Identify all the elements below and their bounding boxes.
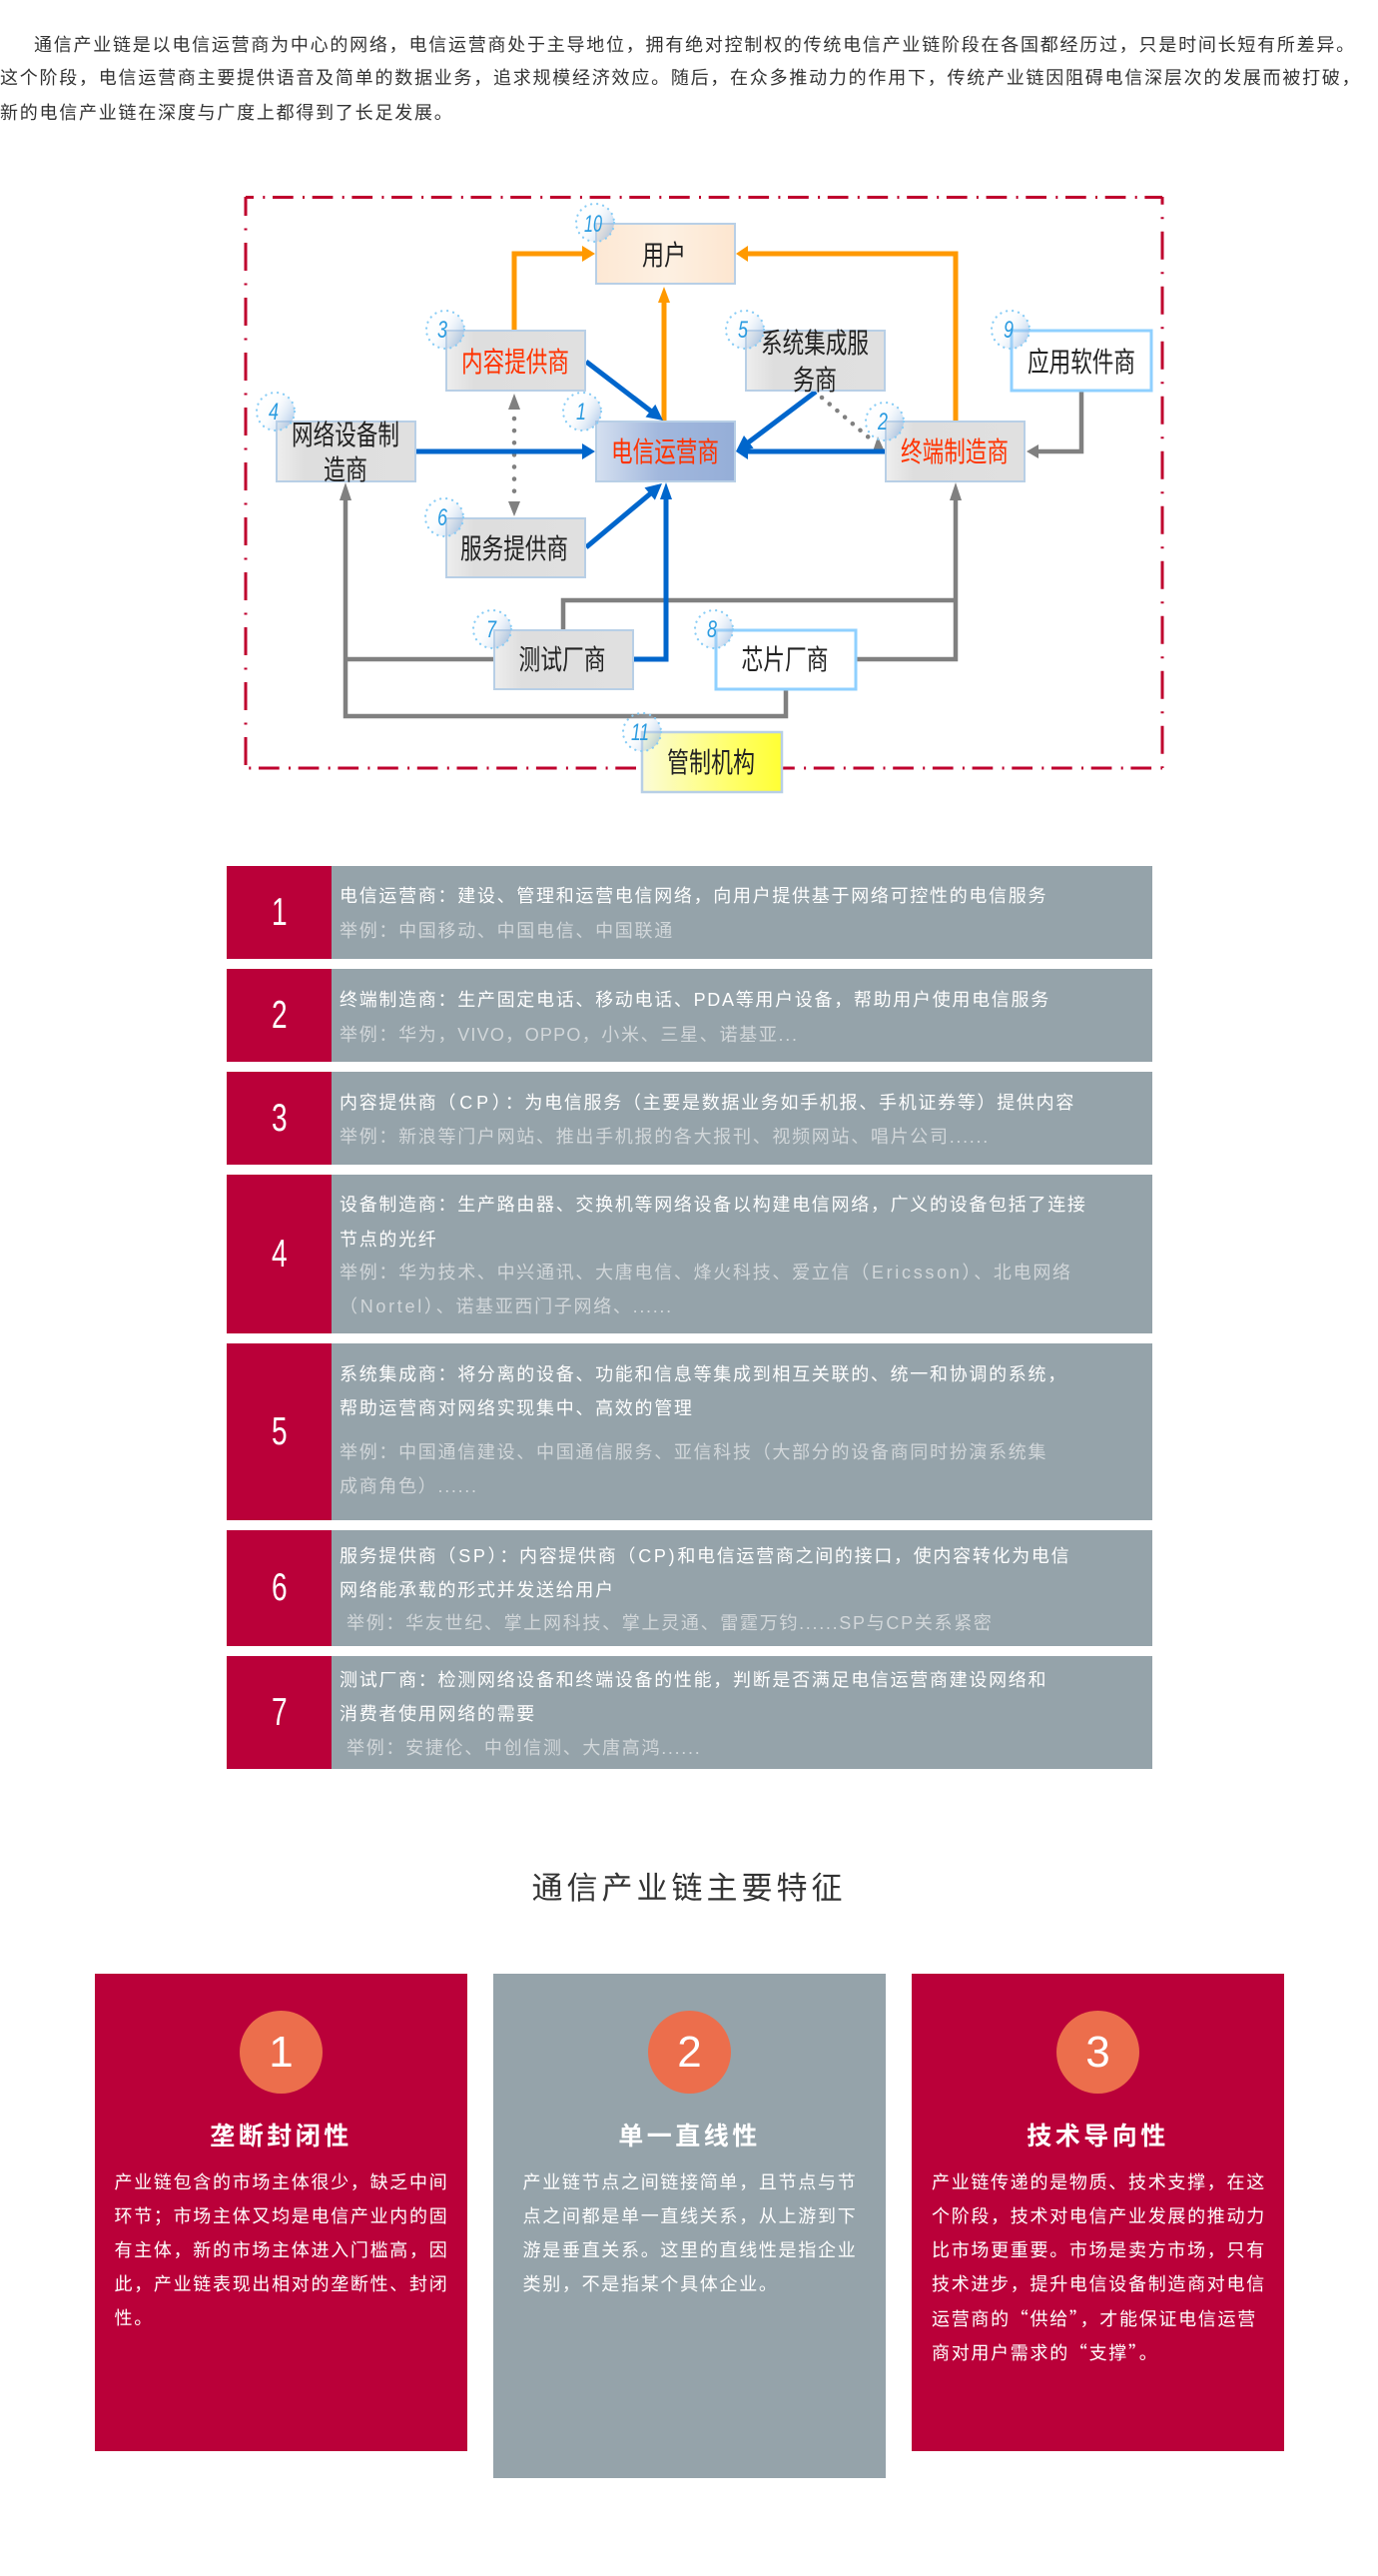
list row 5: 举例：中国通信建设、中国通信服务、亚信科技（大部分的设备商同时扮演系统集: [340, 1442, 1047, 1462]
arrows: dotted grey: [508, 394, 885, 516]
card 1 body: [114, 2172, 448, 2328]
numbered dotted badges: 9: [1004, 317, 1014, 344]
list row 3: 举例：新浪等门户网站、推出手机报的各大报刊、视频网站、唱片公司......: [340, 1127, 990, 1147]
box: 内容提供商: [446, 331, 585, 391]
card 1 heading: 垄断封闭性: [210, 2123, 352, 2150]
numbered dotted badges: 10: [584, 211, 602, 238]
arrows: orange to user: [514, 246, 956, 421]
list row 2: 2: [272, 993, 287, 1037]
box: 终端制造商: [886, 422, 1025, 481]
box: 用户: [596, 224, 735, 284]
box: 测试厂商: [494, 630, 633, 689]
list row 6: 网络能承载的形式并发送给用户: [340, 1580, 615, 1600]
numbered dotted badges: 6: [437, 504, 447, 531]
box: 终端制造商: 终端制造商: [901, 436, 1009, 467]
list row 1: 举例：中国移动、中国电信、中国联通: [340, 921, 674, 941]
numbered dotted badges: 7: [486, 616, 497, 643]
list row 1: 电信运营商：建设、管理和运营电信网络，向用户提供基于网络可控性的电信服务: [340, 885, 1047, 905]
box: 管制机构: 管制机构: [667, 747, 755, 778]
list row 7: 举例：安捷伦、中创信测、大唐高鸿......: [346, 1738, 701, 1758]
numbered dotted badges: 3: [437, 317, 447, 344]
list row 7: [227, 1656, 1152, 1769]
card 2 heading: 单一直线性: [618, 2123, 761, 2150]
list row 3: 3: [272, 1097, 287, 1139]
card 3 body: [932, 2172, 1266, 2365]
numbered dotted badges: 11: [631, 719, 649, 746]
arrows: grey connections: [340, 392, 1081, 716]
list row 7: 测试厂商：检测网络设备和终端设备的性能，判断是否满足电信运营商建设网络和: [340, 1670, 1047, 1690]
box: 系统集成服务商: [746, 328, 885, 396]
list row 7: 7: [272, 1690, 287, 1734]
card 3 number badge: [1056, 2011, 1139, 2094]
numbered dotted badges: 4: [269, 399, 279, 426]
card 1 body: 此，产业链表现出相对的垄断性、封闭: [114, 2274, 448, 2294]
card 1 body: 性。: [114, 2308, 154, 2328]
list row 6: 6: [272, 1566, 287, 1609]
card 1: [95, 1974, 467, 2451]
list row 5: 成商角色）......: [340, 1476, 478, 1496]
dash-dot frame: [246, 197, 1162, 768]
card 2 number badge: [648, 2011, 731, 2094]
list row 2: 举例：华为，VIVO，OPPO，小米、三星、诺基亚...: [340, 1025, 799, 1045]
list row 6: 服务提供商（SP）：内容提供商（CP)和电信运营商之间的接口，使内容转化为电信: [340, 1546, 1070, 1566]
list row 4: 设备制造商：生产路由器、交换机等网络设备以构建电信网络，广义的设备包括了连接: [340, 1195, 1087, 1215]
section heading: 通信产业链主要特征: [531, 1871, 847, 1906]
list row 1: 1: [272, 891, 287, 933]
list row 4: [227, 1175, 1152, 1333]
box: 应用软件商: 应用软件商: [1028, 347, 1135, 378]
card 3 number badge: 3: [1085, 2028, 1110, 2077]
box: 服务提供商: 服务提供商: [460, 533, 568, 564]
list row 6: [227, 1530, 1152, 1646]
industry chain diagram: [244, 196, 1164, 793]
card 3 heading: 技术导向性: [1027, 2123, 1169, 2150]
box: 电信运营商: [596, 422, 735, 481]
box: 系统集成服务商: 务商: [793, 365, 837, 396]
intro paragraph: 通信产业链是以电信运营商为中心的网络，电信运营商处于主导地位，拥有绝对控制权的传统电信产业链阶段在各国都经历过，只是时间长短有所差异。: [34, 35, 1356, 55]
list row 7: 消费者使用网络的需要: [340, 1704, 536, 1724]
card 2 body: 游是垂直关系。这里的直线性是指企业: [523, 2240, 857, 2260]
box: 电信运营商: 电信运营商: [611, 436, 719, 467]
list row 4: （Nortel）、诺基亚西门子网络、......: [340, 1296, 673, 1316]
card 3 body: 技术进步，提升电信设备制造商对电信: [932, 2274, 1266, 2294]
numbered dotted badges: 1: [576, 399, 586, 426]
intro paragraph: [0, 35, 1361, 123]
card 2 body: [523, 2172, 857, 2294]
list row 5: 5: [272, 1410, 287, 1452]
box: 芯片厂商: [716, 630, 856, 689]
box: 测试厂商: 测试厂商: [519, 644, 605, 675]
list row 4: 4: [272, 1233, 287, 1275]
numbered dotted badges: 2: [877, 409, 888, 435]
numbered dotted badges: [257, 204, 1030, 751]
card 1 body: 产业链包含的市场主体很少，缺乏中间: [114, 2172, 448, 2192]
box: 系统集成服务商: 系统集成服: [761, 328, 869, 359]
box: 网络设备制造商: [277, 420, 415, 485]
card 2 body: 类别，不是指某个具体企业。: [523, 2274, 779, 2294]
arrows: blue to operator: [415, 362, 885, 659]
list row 3: 内容提供商（CP）：为电信服务（主要是数据业务如手机报、手机证券等）提供内容: [340, 1093, 1075, 1113]
box: 网络设备制造商: 网络设备制: [292, 420, 399, 450]
intro paragraph: 新的电信产业链在深度与广度上都得到了长足发展。: [0, 103, 453, 123]
card 3 body: 产业链传递的是物质、技术支撑，在这: [932, 2172, 1266, 2192]
card 3 body: 商对用户需求的“支撑”。: [932, 2339, 1158, 2365]
list row 3: [227, 1072, 1152, 1165]
box: 用户: 用户: [642, 240, 686, 271]
list row 4: 节点的光纤: [340, 1229, 437, 1249]
card 3 body: 比市场更重要。市场是卖方市场，只有: [932, 2240, 1266, 2260]
numbered dotted badges: 5: [738, 317, 748, 344]
card 2 body: 点之间都是单一直线关系，从上游到下: [523, 2206, 857, 2226]
card 1 number badge: [240, 2011, 323, 2094]
box: 服务提供商: [446, 518, 585, 577]
card 1 body: 有主体，新的市场主体进入门槛高，因: [114, 2240, 448, 2260]
box: 应用软件商: [1012, 331, 1151, 391]
box: 管制机构: [642, 732, 782, 792]
numbered dotted badges: 8: [707, 616, 717, 643]
box: 芯片厂商: 芯片厂商: [741, 644, 829, 675]
list row 5: [227, 1343, 1152, 1520]
list row 6: 举例：华友世纪、掌上网科技、掌上灵通、雷霆万钧......SP与CP关系紧密: [346, 1612, 994, 1632]
card 2: [493, 1974, 886, 2478]
card 1 body: 环节；市场主体又均是电信产业内的固: [114, 2206, 448, 2226]
intro paragraph: 这个阶段，电信运营商主要提供语音及简单的数据业务，追求规模经济效应。随后，在众多推动力的作用下，传统产业链因阻碍电信深层次的发展而被打破，: [0, 68, 1361, 88]
card 1 number badge: 1: [269, 2028, 294, 2077]
card 3 body: 运营商的“供给”，才能保证电信运营: [932, 2305, 1257, 2331]
list row 2: 终端制造商：生产固定电话、移动电话、PDA等用户设备，帮助用户使用电信服务: [340, 989, 1050, 1009]
list row 5: 帮助运营商对网络实现集中、高效的管理: [340, 1398, 694, 1418]
list row 1: [227, 866, 1152, 959]
list row 2: [227, 969, 1152, 1062]
list row 5: 系统集成商：将分离的设备、功能和信息等集成到相互关联的、统一和协调的系统，: [340, 1364, 1067, 1384]
card 3 body: 个阶段，技术对电信产业发展的推动力: [932, 2206, 1266, 2226]
card 3: [912, 1974, 1284, 2451]
card 2 body: 产业链节点之间链接简单，且节点与节: [523, 2172, 857, 2192]
list row 4: 举例：华为技术、中兴通讯、大唐电信、烽火科技、爱立信（Ericsson）、北电网络: [340, 1263, 1072, 1283]
card 2 number badge: 2: [677, 2028, 702, 2077]
box: 网络设备制造商: 造商: [324, 454, 367, 485]
box: 内容提供商: 内容提供商: [461, 347, 569, 378]
